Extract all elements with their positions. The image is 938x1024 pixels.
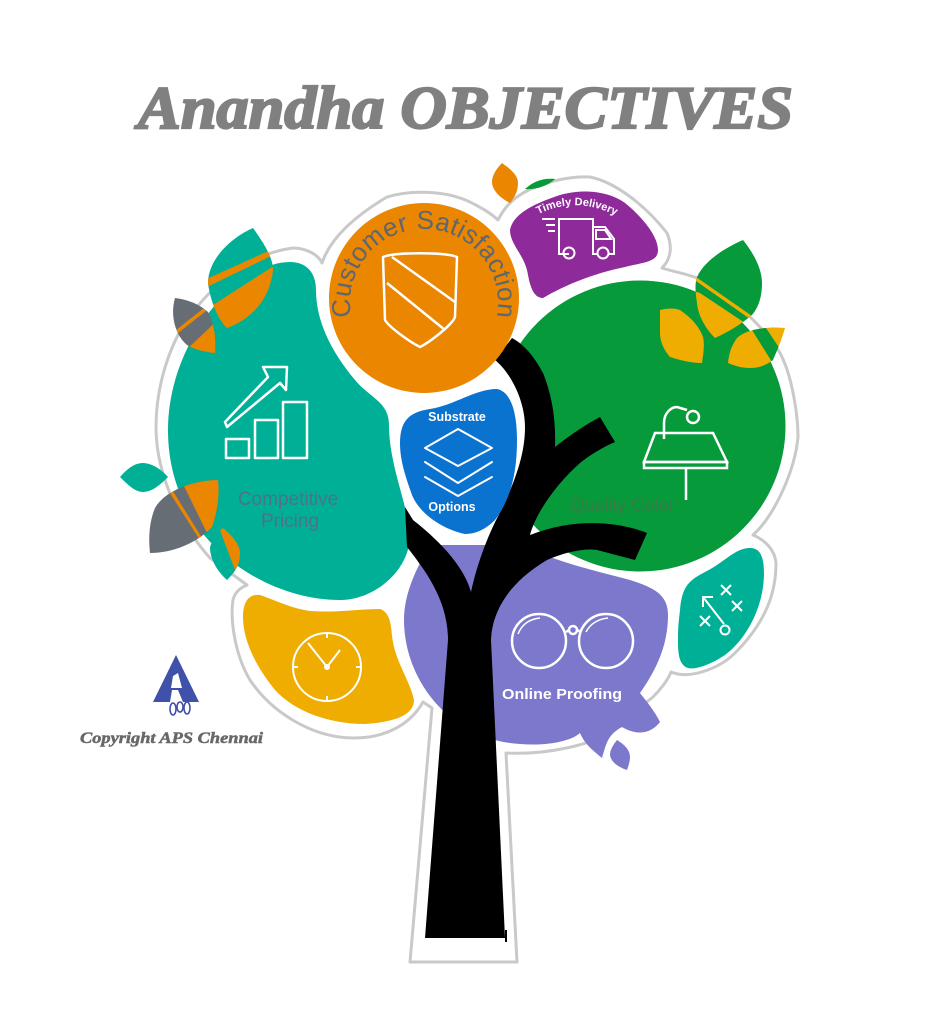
label: competitive pricing: Pricing: [261, 511, 319, 532]
leaf: grey and orange: [173, 298, 216, 353]
icon: delivery truck: [542, 219, 614, 258]
label: timely delivery: Timely Delivery: [535, 198, 618, 216]
tree trunk and branches: [405, 338, 647, 942]
leaf: violet small: [610, 740, 630, 770]
leaf: top orange: [492, 163, 518, 203]
tree outline: [156, 177, 798, 962]
title: Anandha OBJECTIVES: [134, 75, 793, 141]
icon: rising bar chart: [225, 367, 307, 458]
label: customer satisfaction: Customer Satisfaction: [332, 210, 514, 316]
panel: quality color: [494, 280, 786, 572]
icon: shield: [383, 253, 457, 347]
icon: clock: [293, 633, 361, 701]
white gap left of branch: [486, 335, 540, 535]
label: online proofing: Online Proofing: [502, 686, 622, 703]
leaf: green and yellow: [696, 240, 762, 338]
leaf: yellow: [660, 308, 704, 363]
panel: customer satisfaction: [329, 203, 519, 393]
leaf: yellow with green band: [728, 328, 785, 368]
leaf: small green: [525, 179, 555, 189]
label: substrate: Substrate: [428, 410, 486, 424]
leaf: grey and orange lower: [149, 480, 219, 553]
leaf: small orange and teal: [210, 528, 240, 580]
icon: play diagram: [700, 585, 742, 634]
panel: online proofing: [404, 545, 668, 758]
label: competitive pricing: Competitive: [238, 489, 338, 510]
icon: lamp sign: [644, 407, 727, 500]
panel: timely delivery: [510, 192, 658, 298]
icon: stacked layers: [425, 429, 492, 496]
panel: competitive pricing: [168, 262, 410, 600]
leaf: small teal: [120, 463, 168, 492]
leaf: top left teal and orange: [208, 228, 273, 328]
panel: yellow clock: [243, 595, 414, 724]
panel: substrate options: [400, 389, 517, 534]
logo: [153, 655, 199, 715]
label: quality color: Quality Color: [570, 495, 674, 515]
label: options: Options: [428, 500, 476, 514]
panel: small teal strategy: [678, 548, 764, 668]
icon: eyeglasses: [512, 614, 633, 668]
copyright text: Copyright APS Chennai: [80, 730, 264, 747]
